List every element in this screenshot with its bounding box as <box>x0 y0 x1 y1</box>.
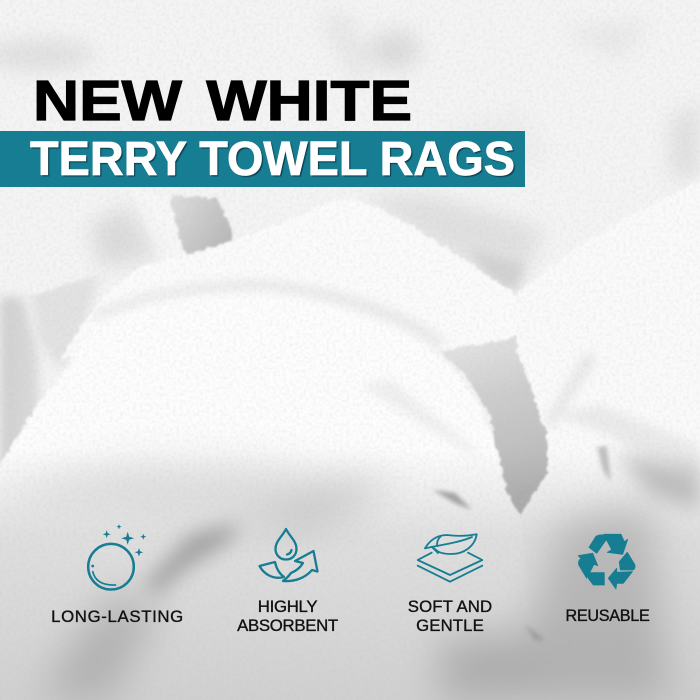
subtle shading on folds <box>95 280 700 480</box>
gray pocket above the V <box>360 195 545 292</box>
feature: reusable <box>566 534 650 624</box>
dark shadow band <box>145 522 240 595</box>
lower-left pockets <box>0 297 40 470</box>
fold cloth pieces above <box>0 188 232 295</box>
shadow right of fold <box>615 450 700 510</box>
main fold <box>0 292 540 700</box>
shading on left cloth <box>90 205 157 268</box>
label: SOFT AND GENTLE <box>408 597 492 635</box>
icon: water drop and arrow <box>258 528 319 582</box>
title block <box>0 69 525 187</box>
icon: shiny sphere with sparkles <box>86 524 146 591</box>
label: REUSABLE: REUSABLE <box>566 606 649 624</box>
upper soft shadows <box>0 10 700 180</box>
top fold <box>60 199 520 360</box>
heading: NEW WHITE: NEW WHITE <box>32 69 412 133</box>
banner: teal <box>0 130 525 187</box>
feature: long-lasting <box>51 524 184 626</box>
label: SOFT AND GENTLE: GENTLE <box>416 616 484 635</box>
feature: highly absorbent <box>236 528 338 635</box>
lower shaded folds <box>0 457 670 700</box>
small creases <box>433 490 472 510</box>
icon: recycling arrows <box>578 534 636 590</box>
gray crease between main fold and right fold <box>420 330 548 517</box>
feature: soft and gentle <box>408 533 492 635</box>
label: HIGHLY ABSORBENT: ABSORBENT <box>237 616 338 635</box>
label: SOFT AND GENTLE: SOFT AND <box>408 597 492 616</box>
icon: leaf over stacked cloth <box>416 533 484 583</box>
label: HIGHLY ABSORBENT: HIGHLY <box>258 597 317 616</box>
label: HIGHLY ABSORBENT <box>236 597 338 635</box>
right fold <box>514 178 700 700</box>
bottom gray fade <box>0 450 700 700</box>
heading: TERRY TOWEL RAGS: TERRY TOWEL RAGS <box>30 133 515 186</box>
label: LONG-LASTING: LONG-LASTING <box>51 607 184 626</box>
